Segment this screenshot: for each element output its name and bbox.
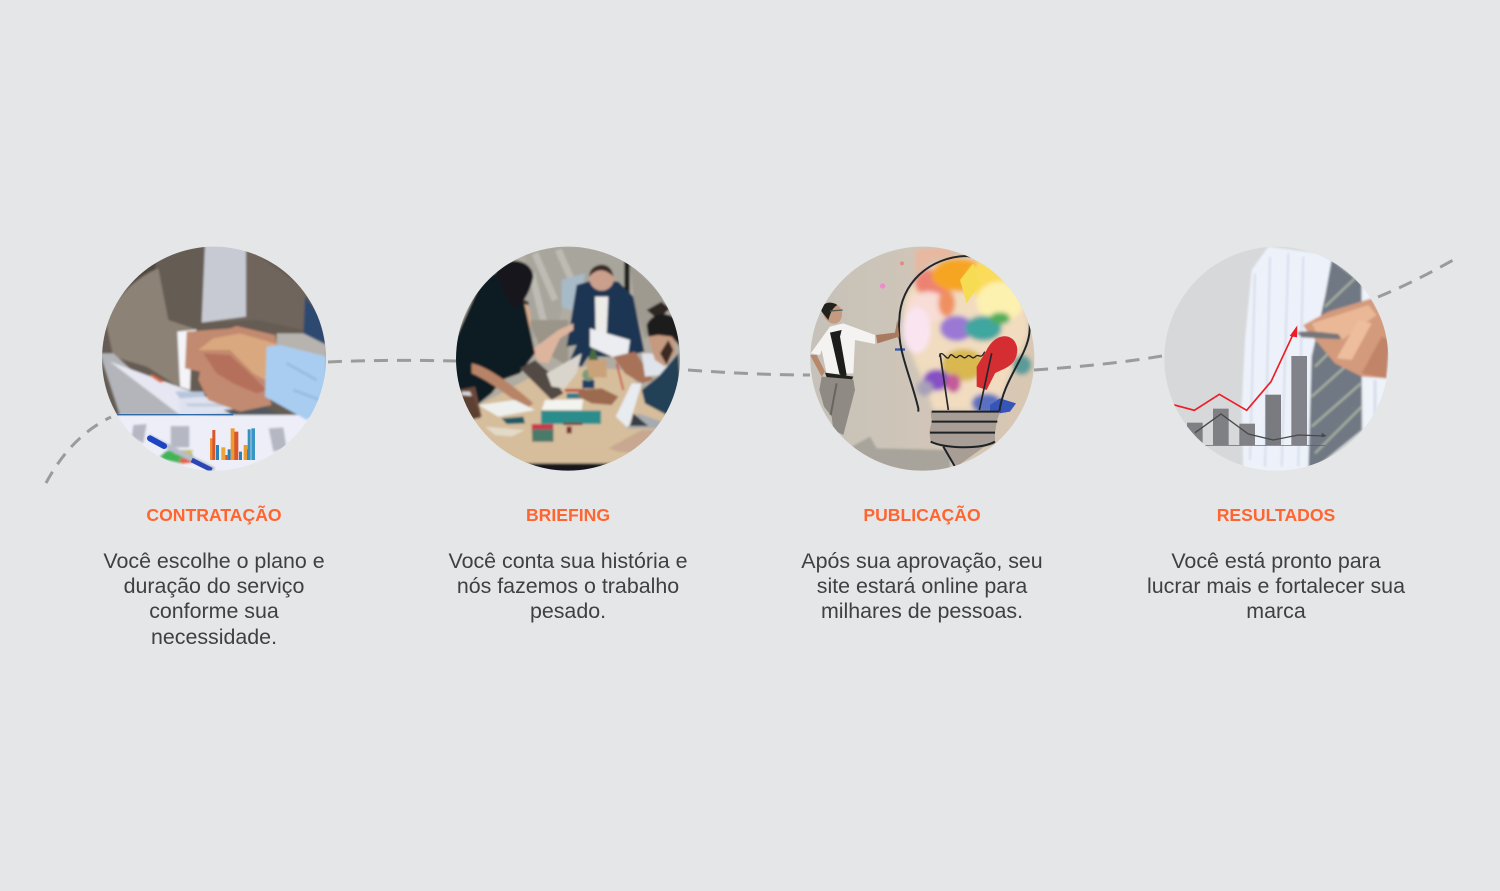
heading: briefing: BRIEFING [526, 505, 610, 525]
dashed path: connector 2 to 3 [688, 370, 810, 375]
photo: handshake [102, 246, 326, 471]
step: contratação [103, 505, 325, 649]
text: publicação description [801, 549, 1043, 623]
dashed path: entry curve [46, 417, 111, 483]
text: briefing description: Você conta sua história e [448, 549, 688, 573]
dashed path: connector 1 to 2 [328, 360, 456, 362]
step: publicação [801, 505, 1043, 623]
text: contratação description: conforme sua [149, 599, 279, 623]
step: resultados [1147, 505, 1406, 623]
text: resultados description: Você está pronto para [1171, 549, 1381, 573]
text: resultados description [1147, 549, 1406, 623]
step: briefing [448, 505, 688, 623]
text: contratação description: duração do serviço [124, 574, 304, 598]
text: briefing description: pesado. [530, 599, 606, 623]
text: briefing description [448, 549, 688, 623]
dashed path: connector 3 to 4 [1034, 356, 1162, 370]
text: resultados description: lucrar mais e fortalecer sua [1147, 574, 1405, 598]
text: publicação description: Após sua aprovação, seu [801, 549, 1043, 573]
dashed path: exit curve [1378, 259, 1455, 297]
text: contratação description: necessidade. [151, 625, 277, 649]
text: briefing description: nós fazemos o trabalho [457, 574, 679, 598]
text: contratação description [103, 549, 325, 649]
text: publicação description: site estará online para [817, 574, 1027, 598]
heading: publicação: PUBLICAÇÃO [863, 505, 981, 525]
photo: team briefing [456, 246, 680, 471]
photo: growth chart and hand [1164, 247, 1388, 470]
text: contratação description: Você escolhe o plano e [103, 549, 325, 573]
text: resultados description: marca [1246, 599, 1306, 623]
heading: resultados: RESULTADOS [1217, 505, 1335, 525]
text: publicação description: milhares de pessoas. [821, 599, 1023, 623]
heading: contratação: CONTRATAÇÃO [146, 505, 282, 525]
photo: man and colourful light bulb [810, 246, 1034, 471]
